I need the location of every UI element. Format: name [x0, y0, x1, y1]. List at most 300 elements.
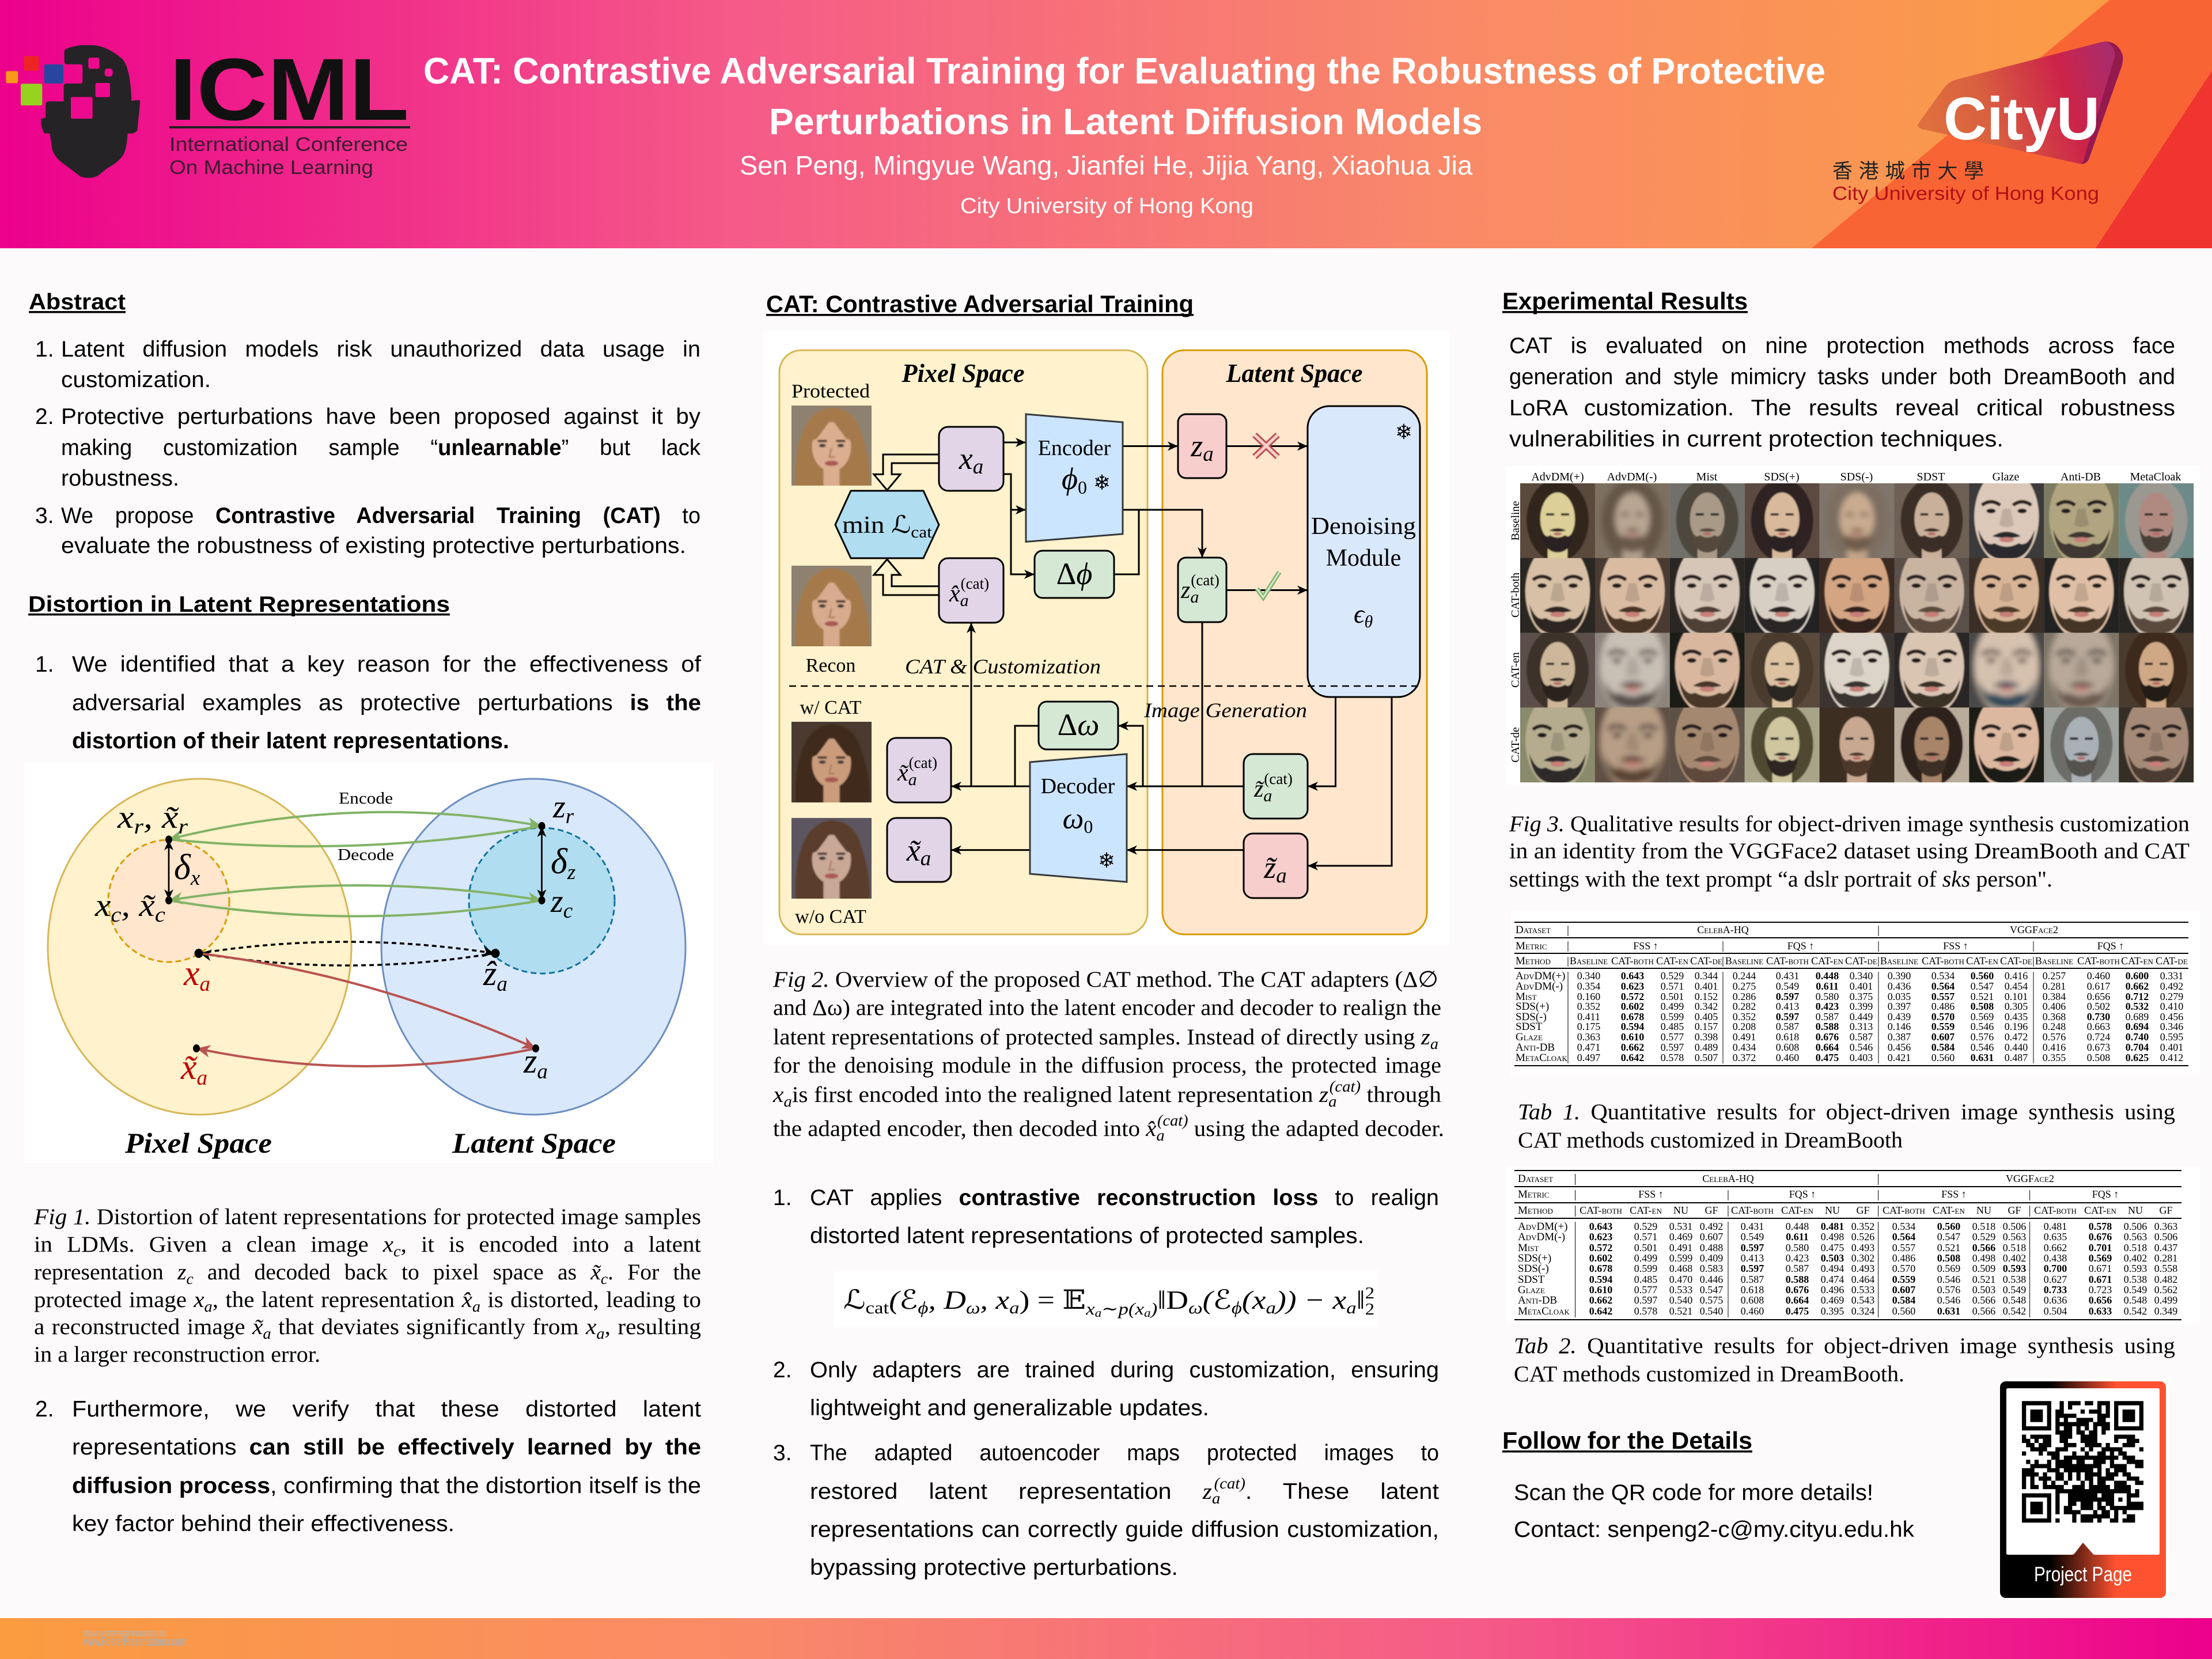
- QR caption: Project Page: [2034, 1562, 2132, 1586]
- equation: contrastive loss: ) = 𝔼: [1020, 1285, 1086, 1315]
- table body: 0.423: [1786, 1252, 1809, 1264]
- encoder: Encoder: [1038, 436, 1111, 460]
- image labels: Protected: [791, 381, 870, 402]
- loss hexagon: [835, 491, 939, 558]
- table body: 0.583: [1700, 1263, 1723, 1274]
- caption: figure 2: (cat): [1330, 1078, 1361, 1095]
- table body: 0.671: [2089, 1263, 2112, 1274]
- table body: 0.569: [1971, 1011, 1994, 1022]
- table body: 0.548: [2003, 1294, 2026, 1306]
- abstract list: [35, 337, 701, 558]
- table body: 0.673: [2087, 1041, 2110, 1053]
- text: CAT points 2 and 3: bypassing protective perturbations.: [810, 1555, 1178, 1580]
- table headers: Dataset: [1516, 924, 1551, 936]
- table body: 0.558: [2154, 1263, 2177, 1274]
- caption: figure 1: , it is encoded into a latent: [401, 1232, 701, 1257]
- box: decoded without CAT: x̃: [907, 833, 921, 868]
- perturbation arrows: [169, 827, 541, 900]
- table body: Anti-DB: [1516, 1041, 1555, 1054]
- math labels: a: [497, 972, 507, 996]
- table body: 0.352: [1733, 1011, 1756, 1022]
- table headers: CAT-both: [2077, 955, 2120, 967]
- equation: contrastive loss: ω: [1188, 1298, 1203, 1317]
- table headers: FSS ↑: [1943, 940, 1968, 952]
- equation: contrastive loss: [834, 1270, 1378, 1327]
- math labels: r: [179, 815, 188, 839]
- table body: 0.588: [1816, 1021, 1839, 1032]
- space titles: Pixel Space: [124, 1127, 272, 1159]
- caption: figure 2: latent representations of protected samples. Instead of directly using z: [773, 1025, 1430, 1050]
- table body: 0.438: [2044, 1252, 2067, 1264]
- hollow arrow: x_a to loss: [874, 454, 939, 490]
- logo subtitle: International Conference: [169, 134, 408, 156]
- decoder: [1030, 754, 1127, 882]
- equation: contrastive loss: cat: [866, 1298, 889, 1317]
- table body: 0.547: [1937, 1231, 1960, 1243]
- text: distortion point 2: diffusion process , confirming that the distortion itself is the: [72, 1474, 701, 1498]
- table body: 0.160: [1577, 991, 1600, 1002]
- logo: CityU: [1832, 41, 2123, 204]
- table body: Glaze: [1518, 1284, 1545, 1296]
- equation: contrastive loss: (ℰ: [889, 1285, 918, 1315]
- caption: figure 2: z: [1319, 1082, 1328, 1107]
- table body: 0.493: [1851, 1242, 1874, 1253]
- equation: contrastive loss: (ℰ: [1203, 1285, 1232, 1315]
- table headers: Dataset: [1518, 1173, 1553, 1185]
- abstract list: 3.: [35, 503, 54, 528]
- table headers: CAT-de: [2156, 955, 2188, 967]
- table headers: NU: [1976, 1205, 1991, 1216]
- table body: 0.566: [1972, 1242, 1995, 1253]
- image labels: [791, 381, 870, 927]
- table body: 0.571: [1661, 980, 1684, 992]
- panel: pixel space: [779, 350, 1147, 934]
- divider between stages: [789, 685, 1419, 687]
- table body: 0.593: [2124, 1263, 2147, 1274]
- text: distortion point 2: Furthermore, we verify that these distorted latent: [72, 1397, 701, 1422]
- table headers: NU: [2128, 1205, 2143, 1216]
- table body: 0.286: [1733, 991, 1756, 1002]
- box: reconstructed x_a cat: x̂: [949, 581, 960, 607]
- table body: 0.608: [1776, 1041, 1799, 1053]
- caption: figure 1: c: [601, 1270, 608, 1287]
- table body: 0.395: [1821, 1305, 1844, 1317]
- table body: 0.543: [1851, 1294, 1874, 1306]
- table body: 0.580: [1786, 1242, 1809, 1253]
- caption: figure 1: that deviates significantly from: [271, 1315, 586, 1339]
- table body: SDS(+): [1516, 1001, 1549, 1013]
- table body: 0.584: [1892, 1294, 1915, 1306]
- distortion point 1: adversarial examples as protective perturbations is the: [72, 691, 701, 715]
- table body: 0.546: [1937, 1294, 1960, 1306]
- table body: 0.401: [1850, 980, 1873, 992]
- box: decoded with CAT: (cat): [909, 754, 937, 771]
- table body: 0.472: [2005, 1031, 2028, 1043]
- decoder: Decoder: [1041, 774, 1115, 798]
- table headers: Method: [1516, 955, 1551, 967]
- equation: contrastive loss: ∼p(x: [1101, 1300, 1145, 1319]
- table body: 0.488: [1700, 1242, 1723, 1253]
- abstract list: making customization sample “unlearnable” but lack: [61, 435, 700, 460]
- column labels: SDS(+): [1764, 471, 1800, 483]
- table body: 0.431: [1776, 970, 1799, 982]
- abstract list: 2.: [35, 404, 54, 429]
- math labels: , x̃: [143, 800, 180, 835]
- table body: 0.499: [1634, 1252, 1657, 1264]
- denoising module: ϵ: [1354, 599, 1365, 628]
- caption: figure 2: Fig 2. Overview of the proposed CAT method. The CAT adapters (Δ∅: [772, 967, 1438, 992]
- table headers: CelebA-HQ: [1697, 924, 1749, 935]
- logo: CityU: 香港城市大學: [1832, 155, 1984, 184]
- caption: figure 2: is first encoded into the realigned latent representation: [792, 1082, 1319, 1107]
- table body: 0.401: [2160, 1041, 2183, 1053]
- table headers: [1516, 924, 2188, 967]
- table body: 0.491: [1733, 1031, 1756, 1043]
- box: delta phi: [1035, 551, 1114, 598]
- table body: 0.549: [2003, 1284, 2026, 1296]
- table body: 0.546: [1937, 1274, 1960, 1285]
- box: generated latent with CAT: [1244, 754, 1308, 819]
- table body: 0.547: [1971, 980, 1994, 992]
- table headers: VGGFace2: [2010, 924, 2058, 935]
- table body: 0.542: [2003, 1305, 2026, 1317]
- caption: table 1: [1518, 1100, 2175, 1153]
- denoising module: θ: [1365, 612, 1373, 631]
- caption: figure 1: x: [585, 1315, 597, 1339]
- math labels: z: [553, 789, 566, 825]
- panel: latent space: [1162, 350, 1427, 934]
- text: contact details: Scan the QR code for more details!: [1514, 1480, 1873, 1505]
- table body: 0.411: [1577, 1011, 1600, 1022]
- box: decoded with CAT: [887, 738, 951, 802]
- caption: table 1: Tab 1. Quantitative results for object-driven image synthesis using: [1518, 1100, 2175, 1124]
- box: generated latent without CAT: [1244, 834, 1308, 898]
- box: z_a cat: z: [1181, 577, 1190, 604]
- logo: ICML: [6, 40, 410, 179]
- caption: table 2: [1514, 1334, 2175, 1387]
- abstract list: robustness.: [61, 466, 179, 491]
- table body: 0.502: [2087, 1001, 2110, 1012]
- logo: CityU: CityU: [1944, 85, 2100, 153]
- table body: 0.610: [1621, 1031, 1644, 1043]
- table body: AdvDM(-): [1516, 980, 1563, 993]
- equation: contrastive loss: ℒ: [843, 1285, 862, 1315]
- table body: 0.546: [1850, 1041, 1873, 1053]
- encoder: 0: [1078, 477, 1087, 498]
- box: z_a: a: [1203, 442, 1214, 466]
- table headers: FSS ↑: [1941, 1188, 1967, 1200]
- caption: figure 2: the adapted encoder, then decoded into x̂: [773, 1116, 1156, 1141]
- table body: 0.485: [1634, 1274, 1657, 1285]
- caption: figure 2: (cat): [1157, 1112, 1188, 1129]
- table body: 0.540: [1669, 1294, 1692, 1306]
- table headers: Baseline: [1725, 955, 1763, 967]
- table body: 0.518: [2124, 1242, 2147, 1253]
- text: CAT points 2 and 3: [773, 1358, 1439, 1580]
- table headers: FQS ↑: [1787, 940, 1814, 952]
- box: delta phi: Δϕ: [1056, 556, 1092, 591]
- math labels: c: [111, 903, 122, 927]
- table body: 0.656: [2089, 1294, 2112, 1306]
- icon: accepted check mark: [1257, 572, 1279, 597]
- abstract list: customization.: [61, 368, 211, 392]
- pixel space ellipse: [48, 779, 351, 1115]
- table body: 0.723: [2089, 1284, 2112, 1296]
- encode and decode arrows: [169, 812, 541, 916]
- table headers: CAT-both: [1611, 955, 1654, 967]
- table body: 0.470: [1669, 1274, 1692, 1285]
- equation: contrastive loss: a: [1144, 1307, 1151, 1320]
- decoder: 0: [1084, 816, 1093, 837]
- table 2: ablation comparison: [1506, 1166, 2200, 1324]
- table body: 0.549: [1741, 1231, 1764, 1243]
- column labels: [1531, 471, 2181, 483]
- table body: 0.355: [2043, 1052, 2066, 1063]
- table body: 0.656: [2087, 991, 2110, 1002]
- table body: 0.397: [1888, 1001, 1911, 1012]
- table body: 0.244: [1733, 970, 1756, 982]
- table body: 0.531: [1669, 1221, 1692, 1232]
- table body: 0.497: [1577, 1052, 1600, 1063]
- table body: 0.157: [1695, 1021, 1718, 1032]
- table body: 0.518: [2003, 1242, 2026, 1253]
- table body: 0.152: [1695, 991, 1718, 1002]
- equation: contrastive loss: 2: [1365, 1301, 1374, 1319]
- table body: 0.481: [1821, 1221, 1844, 1232]
- table body: 0.560: [1892, 1305, 1915, 1317]
- caption: figure 3: Fig 3. Qualitative results for object-driven image synthesis customization: [1509, 812, 2190, 836]
- distortion point 1: We identified that a key reason for the effectiveness of: [72, 652, 701, 677]
- table body: 0.387: [1888, 1031, 1911, 1043]
- table body: 0.460: [1776, 1052, 1799, 1063]
- image labels: w/ CAT: [800, 697, 862, 718]
- table body: 0.580: [1816, 991, 1839, 1002]
- table body: 0.618: [1741, 1284, 1764, 1296]
- table body: 0.576: [1971, 1031, 1994, 1043]
- row labels: Baseline: [1509, 501, 1522, 540]
- table headers: Metric: [1516, 940, 1547, 952]
- logo: CityU: City University of Hong Kong: [1832, 183, 2099, 204]
- caption: figure 1: representation z: [34, 1260, 186, 1285]
- caption: figure 1: , resulting: [605, 1315, 701, 1339]
- box: delta omega: [1039, 702, 1118, 749]
- math labels: ẑ: [483, 955, 497, 993]
- table rules: [1514, 1171, 2181, 1320]
- column labels: SDS(-): [1840, 471, 1873, 483]
- math labels: z: [524, 1042, 537, 1080]
- column labels: Mist: [1696, 471, 1718, 483]
- table body: 0.410: [2160, 1001, 2183, 1012]
- table body: 0.694: [2126, 1021, 2149, 1032]
- equation: contrastive loss: )) − x: [1274, 1285, 1347, 1315]
- table body: 0.560: [1931, 1052, 1955, 1063]
- box: decoded with CAT: a: [908, 770, 917, 789]
- table body: 0.534: [1892, 1221, 1915, 1232]
- text: CAT points 2 and 3: restored latent representation z: [810, 1479, 1211, 1504]
- equation: contrastive loss: a: [1009, 1298, 1020, 1317]
- table body: 0.607: [1892, 1284, 1915, 1296]
- math labels: c: [563, 899, 573, 923]
- table body: 0.196: [2005, 1021, 2028, 1032]
- table body: 0.597: [1776, 1011, 1799, 1022]
- banner accent: orange wedge: [1812, 0, 2212, 248]
- math labels: δ: [551, 842, 567, 881]
- table headers: CAT-both: [1883, 1205, 1925, 1216]
- text: contact details: [1514, 1480, 1915, 1542]
- table headers: CAT-both: [1766, 955, 1809, 967]
- caption: figure 1: a: [596, 1325, 605, 1342]
- table body: 0.625: [2126, 1052, 2149, 1063]
- table body: 0.413: [1776, 1001, 1799, 1012]
- table body: 0.529: [1634, 1221, 1657, 1232]
- table body: 0.636: [2044, 1294, 2067, 1306]
- table body: 0.566: [1972, 1294, 1995, 1306]
- table body: 0.602: [1589, 1252, 1612, 1264]
- caption: table 2: Tab 2. Quantitative results for object-driven image synthesis using: [1514, 1334, 2175, 1358]
- table body: 0.724: [2087, 1031, 2110, 1043]
- row labels: CAT-en: [1509, 652, 1522, 688]
- caption: figure 1: x̃: [590, 1260, 601, 1285]
- equation: contrastive loss: ω: [966, 1298, 980, 1317]
- space titles: [124, 1127, 616, 1159]
- box: generated latent with CAT: (cat): [1264, 770, 1293, 787]
- denoising module: [1308, 406, 1420, 697]
- table headers: NU: [1673, 1205, 1688, 1216]
- table body: 0.146: [1888, 1021, 1911, 1032]
- box: z_a: z: [1191, 429, 1203, 463]
- table headers: Baseline: [1570, 955, 1608, 967]
- table column dividers: [1575, 1174, 2030, 1317]
- adversarial dotted arrows: [199, 942, 494, 965]
- table body: 0.475: [1816, 1052, 1839, 1063]
- table body: 0.633: [2089, 1305, 2112, 1317]
- box: z_a cat: a: [1190, 588, 1199, 607]
- table body: 0.587: [1776, 1021, 1799, 1032]
- table body: 0.587: [1850, 1031, 1873, 1043]
- authors: Sen Peng, Mingyue Wang, Jianfei He, Jijia Yang, Xiaohua Jia: [740, 150, 1472, 180]
- table body: 0.302: [1851, 1252, 1874, 1264]
- table body: 0.460: [1741, 1305, 1764, 1317]
- table body: 0.331: [2160, 970, 2183, 982]
- table body: 0.456: [2160, 1011, 2183, 1022]
- caption: figure 1: protected image x: [34, 1287, 204, 1312]
- table body: 0.548: [2124, 1294, 2147, 1306]
- table body: 0.508: [2087, 1052, 2110, 1063]
- distortion point 1: [35, 652, 701, 753]
- table body: 0.475: [1786, 1305, 1809, 1317]
- caption: figure 2: a: [1328, 1093, 1337, 1110]
- box: decoded with CAT: x̃: [897, 760, 908, 786]
- equation: contrastive loss: ϕ: [918, 1298, 929, 1317]
- table body: 0.597: [1741, 1242, 1764, 1253]
- table body: 0.506: [2154, 1231, 2177, 1243]
- text: CAT points 2 and 3: (cat): [1214, 1475, 1245, 1492]
- caption: figure 1: a: [472, 1298, 480, 1315]
- table headers: Metric: [1518, 1188, 1549, 1200]
- column labels: AdvDM(-): [1607, 471, 1657, 483]
- math labels: r: [566, 805, 574, 828]
- text: experimental summary: CAT is evaluated on nine protection methods across face: [1509, 334, 2175, 358]
- table body: 0.570: [1892, 1263, 1915, 1274]
- box: generated latent without CAT: z̃: [1264, 850, 1276, 885]
- column labels: MetaCloak: [2130, 471, 2181, 483]
- text: experimental summary: vulnerabilities in current protection techniques.: [1509, 427, 2003, 452]
- box: reconstructed x_a cat: (cat): [961, 575, 989, 592]
- caption: figure 1: a reconstructed image x̃: [34, 1315, 262, 1339]
- table body: 0.599: [1669, 1252, 1692, 1264]
- table body: 0.384: [2043, 991, 2066, 1002]
- caption: figure 1: Fig 1. Distortion of latent representations for protected image samples: [33, 1205, 701, 1229]
- text: CAT points 2 and 3: representations can correctly guide diffusion customization,: [810, 1517, 1439, 1542]
- equation: contrastive loss: a: [1346, 1298, 1357, 1317]
- math labels: c: [155, 903, 166, 927]
- table rules: [1514, 922, 2188, 1066]
- table body: 0.409: [1700, 1252, 1723, 1264]
- table body: 0.363: [2154, 1221, 2177, 1232]
- equation: contrastive loss: , D: [929, 1285, 966, 1315]
- table body: 0.689: [2126, 1011, 2149, 1022]
- table body: 0.662: [1621, 1041, 1644, 1053]
- table body: 0.509: [1972, 1263, 1995, 1274]
- table body: 0.571: [1634, 1231, 1657, 1243]
- table body: 0.602: [1621, 1001, 1644, 1012]
- table body: 0.578: [2089, 1221, 2112, 1232]
- table body: 0.588: [1786, 1274, 1809, 1285]
- table body: 0.542: [2124, 1305, 2147, 1317]
- caption: figure 1: in a larger reconstruction error.: [34, 1342, 320, 1367]
- table body: 0.663: [2087, 1021, 2110, 1032]
- row labels: [1509, 501, 1522, 763]
- table body: 0.507: [1695, 1052, 1718, 1063]
- table body: 0.676: [1816, 1031, 1839, 1043]
- latent space ellipse: [381, 779, 685, 1115]
- panel: distortion in latent representations: [28, 592, 701, 753]
- math labels: x: [184, 954, 200, 993]
- text: CAT points 2 and 3: The adapted autoencoder maps protected images to: [810, 1441, 1439, 1465]
- table body: AdvDM(+): [1516, 970, 1565, 982]
- table body: 0.434: [1733, 1041, 1756, 1053]
- box: decoded without CAT: [887, 818, 951, 882]
- table body: 0.704: [2126, 1041, 2149, 1053]
- table body: 0.436: [1888, 980, 1911, 992]
- table body: 0.564: [1892, 1231, 1915, 1243]
- abstract list: 1.: [35, 337, 54, 362]
- heading: abstract: Abstract: [29, 290, 126, 315]
- table body: MetaCloak: [1516, 1052, 1568, 1064]
- row: CAT-en faces: [1509, 618, 2205, 719]
- table headers: [1518, 1173, 2173, 1217]
- decoder: ω: [1063, 802, 1084, 835]
- table body: 0.449: [1850, 1011, 1873, 1022]
- table body: 0.662: [2126, 980, 2149, 992]
- math labels: a: [197, 1066, 207, 1090]
- table headers: FQS ↑: [2092, 1188, 2119, 1200]
- table body: 0.492: [1700, 1221, 1723, 1232]
- table headers: CAT-en: [1966, 955, 1998, 967]
- table body: 0.529: [1661, 970, 1684, 982]
- heading: experimental results: Experimental Results: [1502, 287, 1748, 315]
- caption: figure 1: and decoded back to pixel space as: [194, 1260, 590, 1285]
- table body: 0.412: [2160, 1052, 2183, 1063]
- inner latent region: [469, 828, 615, 974]
- row: CAT-both faces: [1509, 543, 2205, 645]
- table body: 0.368: [2043, 1011, 2066, 1022]
- math labels: x: [190, 866, 200, 890]
- table body: 0.363: [1577, 1031, 1600, 1043]
- table body: 0.508: [1937, 1252, 1960, 1264]
- box: reconstructed x_a cat: a: [960, 591, 969, 610]
- table body: 0.468: [1669, 1263, 1692, 1274]
